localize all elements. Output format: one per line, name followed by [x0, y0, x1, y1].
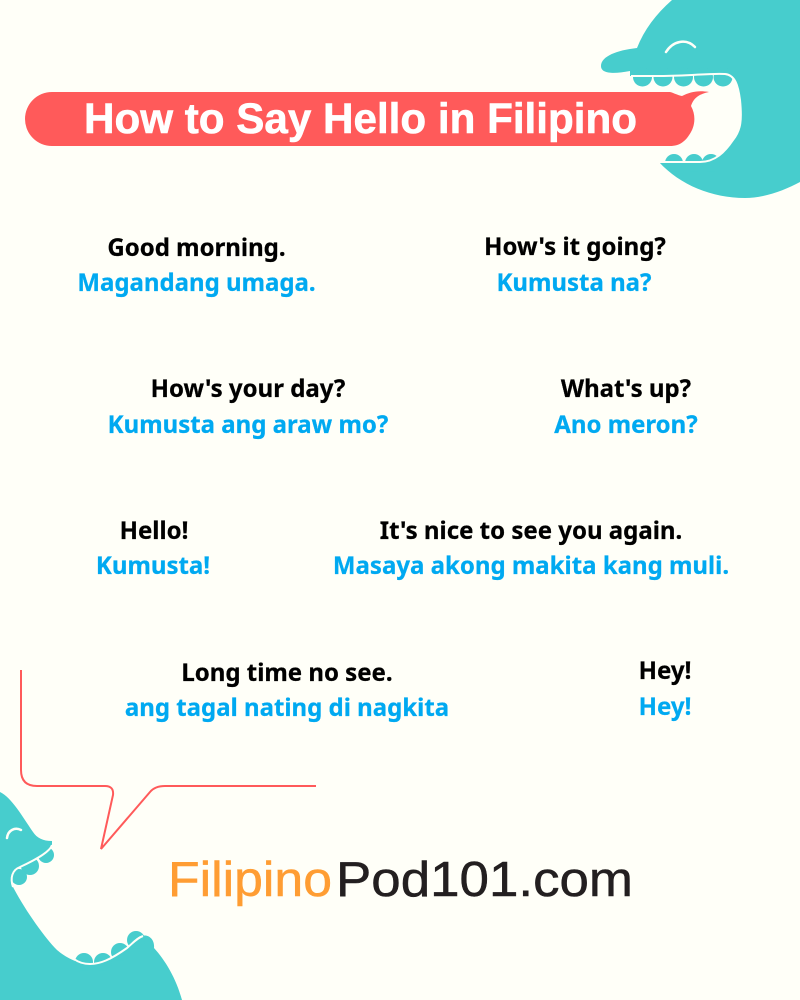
phrase: how's your day — [108, 372, 388, 441]
logo: Pod101.com: Pod101.com — [336, 853, 633, 907]
speech bubble outline — [21, 670, 316, 849]
phrase: how's it going: Kumusta na? — [496, 266, 652, 299]
phrase: good morning: Good morning. — [107, 231, 286, 264]
phrase: good morning: Magandang umaga. — [77, 266, 316, 299]
phrase: long time no see — [125, 656, 449, 724]
phrase: hello: Kumusta! — [96, 549, 210, 582]
phrase: hello: Hello! — [120, 514, 188, 547]
phrase: how's your day: Kumusta ang araw mo? — [108, 408, 388, 441]
phrase: nice to see you: It's nice to see you again. — [380, 514, 682, 547]
phrase: what's up — [554, 372, 698, 441]
phrase: what's up: Ano meron? — [554, 408, 698, 441]
phrase: hello — [96, 514, 210, 582]
icon: top whale — [601, 0, 800, 198]
phrase: hey: Hey! — [639, 690, 691, 723]
phrase: how's your day: How's your day? — [151, 372, 345, 405]
phrase: good morning — [77, 231, 316, 299]
logo — [168, 853, 633, 907]
logo: Filipino: Filipino — [168, 853, 332, 907]
title text: How to Say Hello in Filipino — [84, 95, 637, 143]
phrase: how's it going: How's it going? — [484, 230, 666, 263]
phrase: hey: Hey! — [639, 654, 691, 687]
phrase: what's up: What's up? — [561, 372, 691, 405]
phrase: long time no see: Long time no see. — [181, 656, 393, 689]
phrase: long time no see: ang tagal nating di nagkita — [125, 691, 449, 724]
phrase: nice to see you — [333, 514, 729, 582]
title banner — [25, 91, 709, 146]
icon: bottom whale — [0, 792, 182, 1000]
phrase: hey — [639, 654, 691, 723]
phrase: nice to see you: Masaya akong makita kang muli. — [333, 549, 729, 582]
phrase: how's it going — [484, 230, 666, 299]
